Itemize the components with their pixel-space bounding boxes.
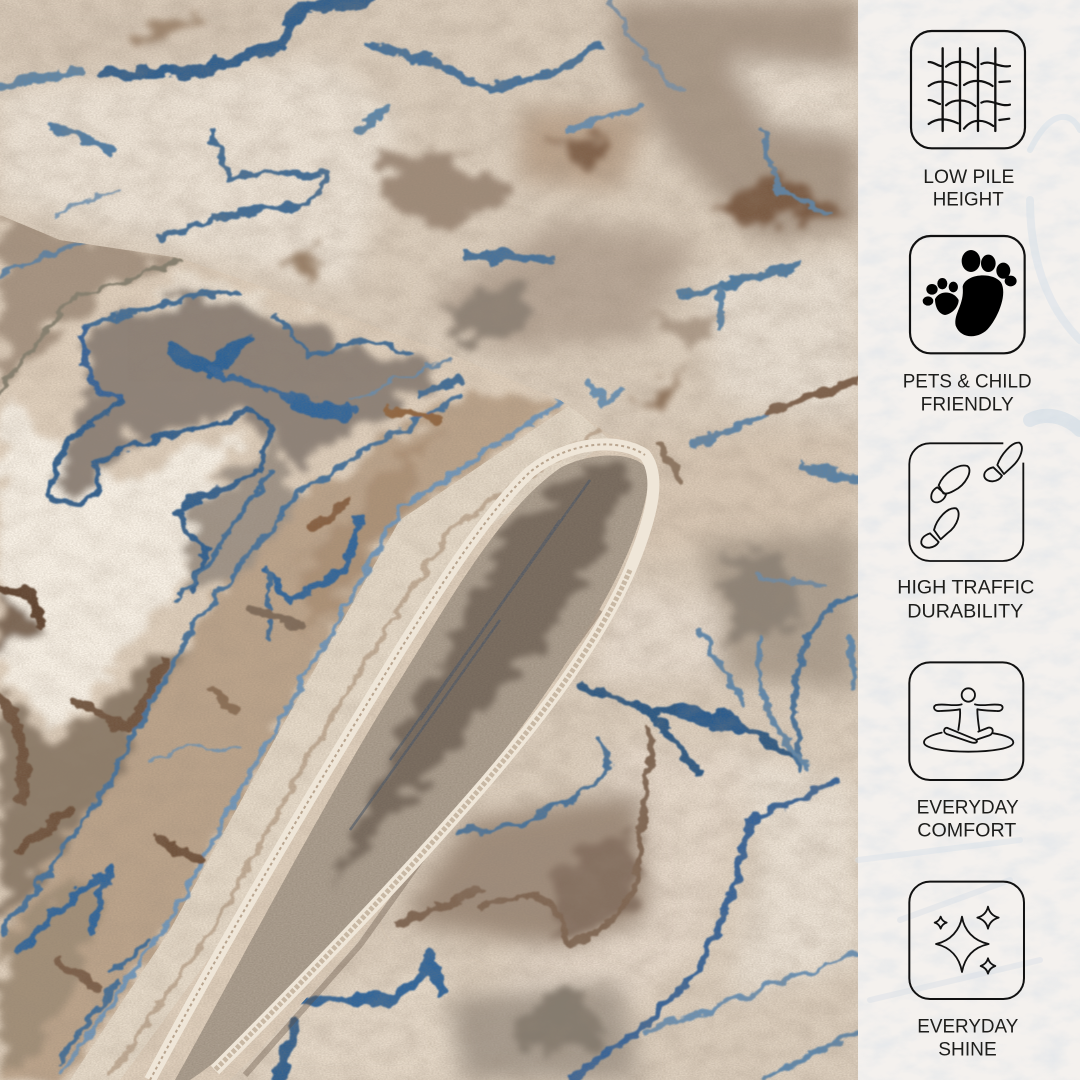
- feature: everyday comfort: [909, 662, 1023, 842]
- icon: paw and foot: [910, 236, 1025, 353]
- feature: high traffic durability: [897, 443, 1034, 623]
- label: HEIGHT: [933, 190, 1004, 211]
- border band: [0, 390, 560, 1080]
- label: EVERYDAY: [917, 797, 1019, 818]
- label: HIGH TRAFFIC: [897, 577, 1034, 598]
- roll mottling: [0, 268, 586, 1061]
- label: [903, 372, 1032, 416]
- label: [923, 167, 1014, 211]
- floor texture: [0, 0, 858, 1080]
- top rug motif patches: [120, 15, 840, 1060]
- label: [917, 797, 1019, 842]
- shadow under roll: [245, 610, 600, 1075]
- label: [917, 1017, 1019, 1061]
- floor mottling: [0, 0, 858, 1080]
- grey medallion: [55, 295, 440, 500]
- cream field: [0, 400, 240, 730]
- icon: pile fibres: [911, 31, 1025, 148]
- label: FRIENDLY: [921, 395, 1014, 416]
- roll texture: [0, 200, 680, 1080]
- top rug blue vine lines: [0, 0, 857, 1080]
- icon: footprints: [909, 443, 1023, 561]
- label: LOW PILE: [923, 167, 1014, 188]
- sidebar panel: [858, 0, 1080, 1080]
- label: DURABILITY: [907, 602, 1024, 623]
- rug underside backing: [170, 440, 660, 1080]
- cream border stripe: [70, 405, 610, 1080]
- roll pattern lines: [0, 240, 600, 1075]
- fringe band: [0, 215, 180, 390]
- label: SHINE: [938, 1040, 997, 1061]
- rolled rug front: [0, 200, 680, 1080]
- feature: everyday shine: [909, 882, 1024, 1061]
- feature: pets and child friendly: [903, 236, 1032, 416]
- label: PETS & CHILD: [903, 372, 1032, 393]
- photo: rug floor surface: [0, 0, 858, 1080]
- cream bound edge: [150, 444, 653, 1080]
- icon: meditating figure: [909, 662, 1023, 780]
- icon: sparkles: [909, 882, 1024, 999]
- label: EVERYDAY: [917, 1017, 1019, 1038]
- label: [897, 577, 1034, 623]
- feature: low pile height: [911, 31, 1025, 211]
- label: COMFORT: [917, 821, 1017, 842]
